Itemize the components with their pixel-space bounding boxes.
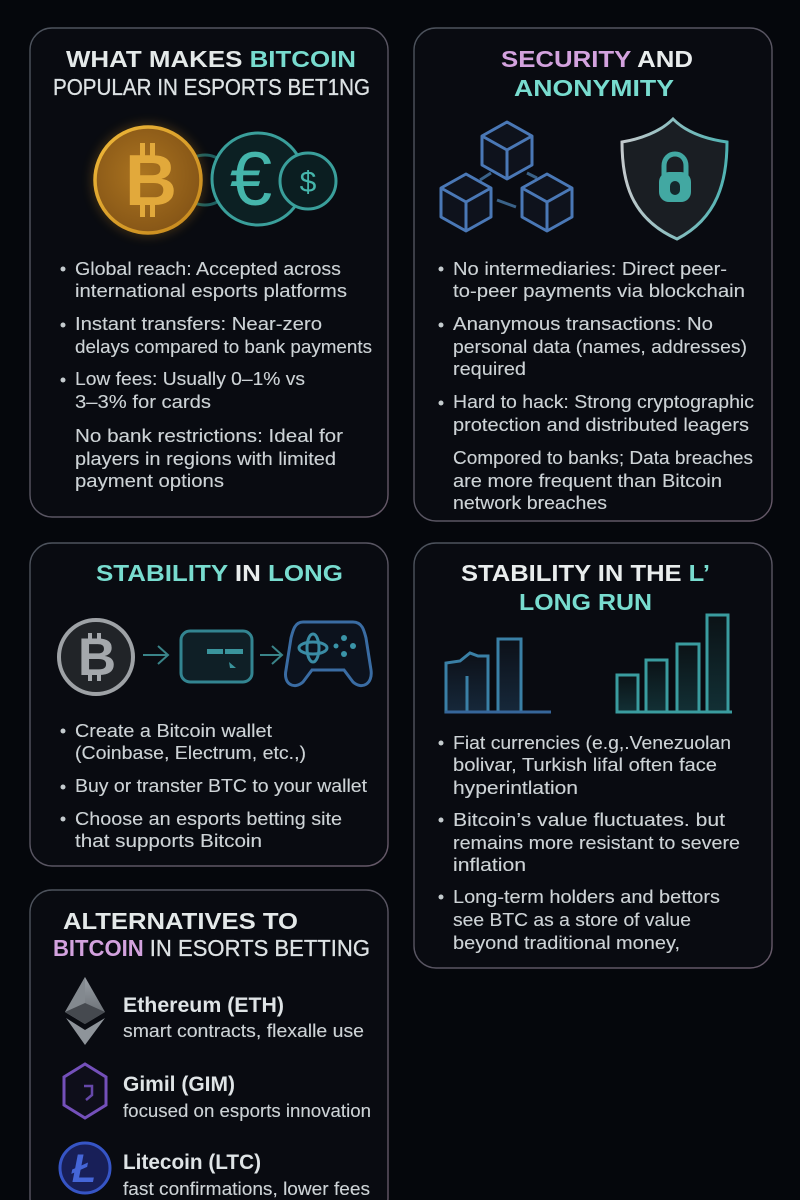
icon: gimil hexagon [64,1064,106,1118]
bullet: hard to hack [438,391,754,435]
item: ethereum: smart contracts, flexalle use [123,1020,364,1041]
icon: litecoin [60,1143,110,1193]
bullet: choose site: that supports Bitcoin [75,830,262,851]
icon: silver bitcoin coin: B [78,628,116,687]
bullet: instant transfers [60,313,372,357]
bullet: instant transfers: Instant transfers: Near-zero [75,313,322,334]
chart: bitcoin bars [616,615,732,712]
bullet: bitcoin value: remains more resistant to severe [453,832,740,853]
icon: bitcoin coin with euro and dollar: $ [300,166,317,199]
bullet: bitcoin value [438,809,740,875]
text: compared to banks: Compored to banks; Data breaches [453,447,753,468]
icon: bitcoin coin with euro and dollar: € [230,137,272,222]
bullet: no intermediaries: to-peer payments via blockchain [453,280,745,301]
heading: stability in the long run: STABILITY IN THE L’ [461,560,710,586]
icon: bitcoin coin with euro and dollar [91,123,336,237]
item: litecoin [60,1143,370,1199]
bullet: create wallet: (Coinbase, Electrum, etc.,) [75,742,306,763]
chart: fiat bars [445,639,551,712]
icon: game controller [285,622,371,686]
bullet: long-term holders: beyond traditional money, [453,932,680,953]
item: litecoin: Litecoin (LTC) [123,1151,261,1174]
bullet: no intermediaries [438,258,745,301]
bullet: bitcoin value: inflation [453,854,526,875]
bullet: low fees: Low fees: Usually 0–1% vs [75,368,305,389]
bullet: buy or transfer: Buy or transter BTC to your wallet [75,775,367,796]
arrow [143,646,168,664]
panel: what makes bitcoin popular [30,28,388,517]
bullet: create wallet: Create a Bitcoin wallet [75,720,272,741]
text: compared to banks: are more frequent than Bitcoin [453,470,722,491]
bullet: no intermediaries: No intermediaries: Direct peer- [453,258,727,279]
text: no bank restrictions: players in regions with limited [75,448,336,469]
text: no bank restrictions: No bank restrictions: Ideal for [75,425,343,446]
text: compared to banks: network breaches [453,492,607,513]
icon: ethereum [65,977,105,1045]
bullet: choose site [60,808,342,851]
bullet: fiat currencies: hyperintlation [453,777,578,798]
item: ethereum: Ethereum (ETH) [123,994,284,1017]
icon: silver bitcoin coin [59,620,133,694]
bullet: choose site: Choose an esports betting site [75,808,342,829]
heading: alternatives to bitcoin: BITCOIN IN ESORTS BETTING [53,935,370,961]
heading: alternatives to bitcoin [53,908,370,961]
heading: security and anonymity [501,46,693,101]
text: no bank restrictions [75,425,343,491]
heading: security and anonymity: SECURITY AND [501,46,693,72]
bullet: bitcoin value: Bitcoin’s value fluctuates. but [453,809,725,830]
bullet: global reach [60,258,347,301]
item: ethereum [65,977,364,1045]
heading: alternatives to bitcoin: ALTERNATIVES TO [63,908,298,934]
icon: blockchain cubes [441,122,572,231]
bullet: instant transfers: delays compared to bank payments [75,336,372,357]
heading: what makes bitcoin popular [53,46,370,100]
bullet: hard to hack: Hard to hack: Strong cryptographic [453,391,754,412]
icon: litecoin: Ł [71,1147,96,1191]
bullet: create wallet [60,720,306,763]
text: compared to banks [453,447,753,513]
bullet: long-term holders: see BTC as a store of value [453,909,691,930]
item: gimil: focused on esports innovation [123,1100,371,1121]
panel: alternatives to bitcoin [30,890,388,1200]
bullet: long-term holders [438,886,720,953]
bullet: low fees: 3–3% for cards [75,391,211,412]
heading: stability in the long run [461,560,710,615]
heading: what makes bitcoin popular: POPULAR IN ESPORTS BET1NG [53,74,370,100]
item: gimil: Gimil (GIM) [123,1073,235,1096]
bullet: anonymous transactions: Ananymous transactions: No [453,313,713,334]
icon: bitcoin coin with euro and dollar: B [125,141,177,221]
heading: what makes bitcoin popular: WHAT MAKES BITCOIN [66,46,356,72]
bullet: fiat currencies: Fiat currencies (e.g,.Venezuolan [453,732,731,753]
bullet: fiat currencies [438,732,731,798]
heading: stability in the long run: LONG RUN [519,589,652,615]
bullet: fiat currencies: bolivar, Turkish lifal often face [453,754,717,775]
panel: security and anonymity [414,28,772,521]
bullet: hard to hack: protection and distributed leagers [453,414,749,435]
heading: security and anonymity: ANONYMITY [514,75,674,101]
bullet: anonymous transactions [438,313,747,379]
icon: shield with padlock [622,119,727,239]
bullet: low fees [60,368,305,412]
arrow [260,646,282,664]
bullet: global reach: Global reach: Accepted across [75,258,341,279]
bullet: long-term holders: Long-term holders and bettors [453,886,720,907]
bullet: anonymous transactions: required [453,358,526,379]
bullet: anonymous transactions: personal data (names, addresses) [453,336,747,357]
item: litecoin: fast confirmations, lower fees [123,1178,370,1199]
panel: stability in the long run [414,543,772,968]
heading: stability in long: STABILITY IN LONG [96,560,343,586]
text: no bank restrictions: payment options [75,470,224,491]
bullet: global reach: international esports platforms [75,280,347,301]
icon: wallet card [181,631,252,682]
item: gimil [64,1064,371,1121]
panel: stability in long [30,543,388,866]
